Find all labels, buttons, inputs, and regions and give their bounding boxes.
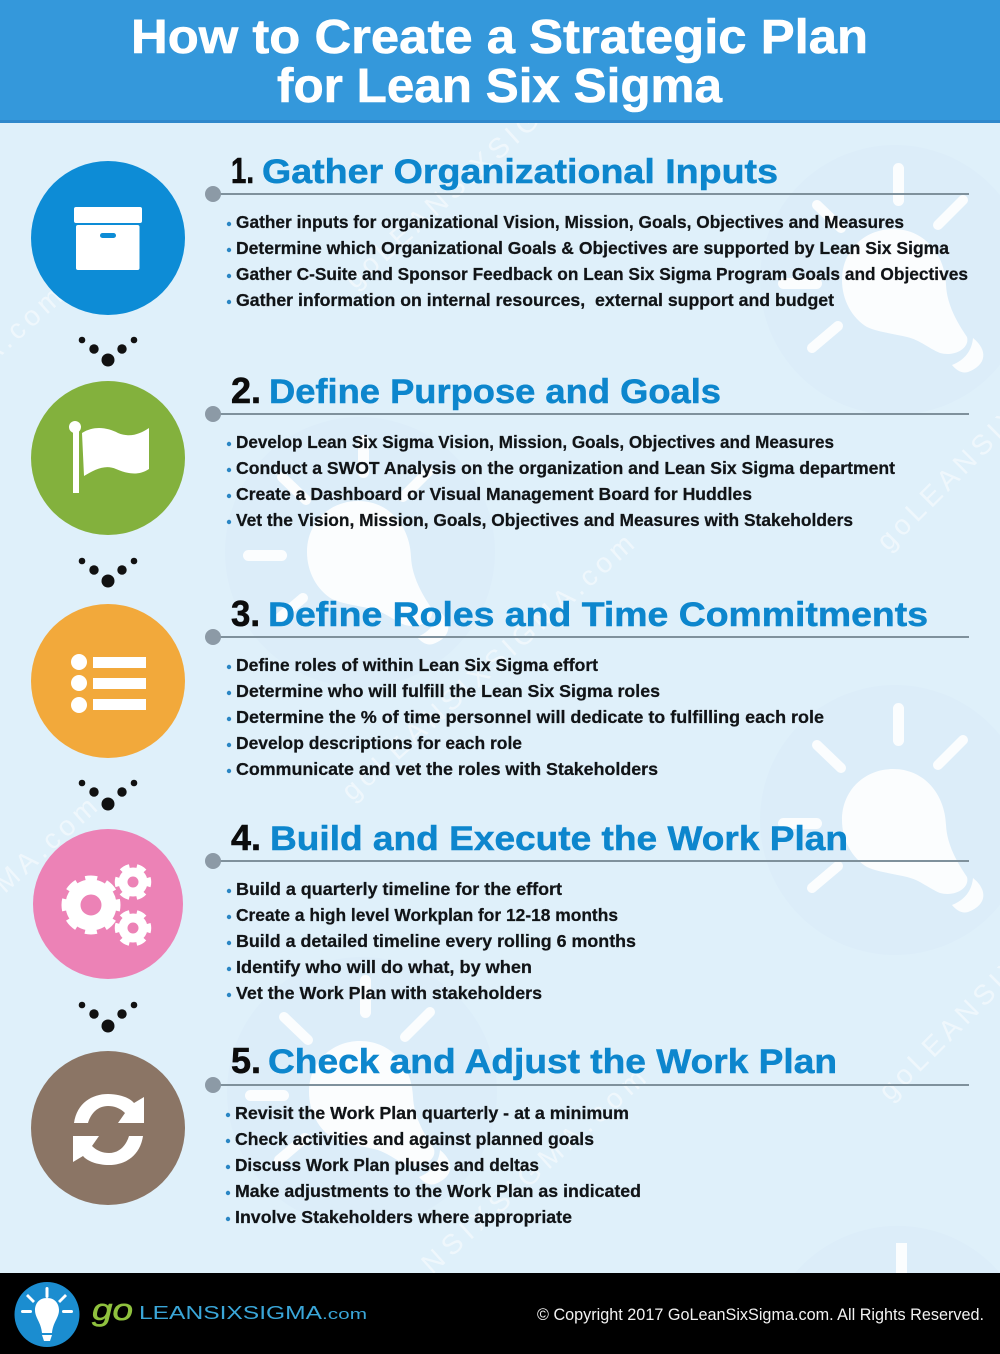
step 5 bullets: Check activities and against planned goals bbox=[235, 1129, 594, 1149]
step 1 section bbox=[205, 150, 969, 310]
footer logo wordmark: .com bbox=[322, 1306, 367, 1323]
step 4 bullets: Identify who will do what, by when bbox=[236, 957, 532, 977]
step 2 heading: 2. bbox=[231, 370, 261, 411]
step 4 rule bbox=[205, 853, 969, 869]
footer logo icon: light bulb bbox=[14, 1282, 80, 1347]
step 3 heading: 3. bbox=[231, 593, 260, 634]
step 5 icon: refresh arrows bbox=[31, 1051, 185, 1205]
step 1 bullets bbox=[227, 212, 968, 310]
step 3 rule bbox=[205, 629, 969, 645]
step 3 bullets: Develop descriptions for each role bbox=[236, 733, 522, 753]
copyright: © Copyright 2017 GoLeanSixSigma.com. All Rights Reserved. bbox=[537, 1306, 984, 1324]
step 2 icon: flag bbox=[31, 381, 185, 535]
title: How to Create a Strategic Plan bbox=[131, 11, 868, 64]
step 1 bullets: Determine which Organizational Goals & Objectives are supported by Lean Six Sigma bbox=[236, 238, 949, 258]
step 3 section bbox=[205, 593, 969, 779]
watermark: brand text group: goLEANSIXSIGMA.com bbox=[335, 528, 640, 806]
step 5 section bbox=[205, 1040, 969, 1227]
step 2 heading: Define Purpose and Goals bbox=[269, 373, 721, 411]
footer logo wordmark: go bbox=[92, 1292, 133, 1327]
step 2 bullets: Develop Lean Six Sigma Vision, Mission, Goals, Objectives and Measures bbox=[236, 432, 834, 452]
header banner bbox=[0, 0, 1000, 123]
step 5 heading: Check and Adjust the Work Plan bbox=[268, 1043, 837, 1081]
step 1 bullets: Gather C-Suite and Sponsor Feedback on Lean Six Sigma Program Goals and Objectives bbox=[236, 264, 968, 284]
step 5 bullets: Make adjustments to the Work Plan as indicated bbox=[235, 1181, 641, 1201]
step 4 section bbox=[205, 817, 969, 1003]
connector dots 2 bbox=[79, 558, 137, 588]
step 2 bullets: Create a Dashboard or Visual Management Board for Huddles bbox=[236, 484, 752, 504]
step 3 heading: Define Roles and Time Commitments bbox=[268, 596, 928, 634]
step 3 bullets: Determine the % of time personnel will dedicate to fulfilling each role bbox=[236, 707, 824, 727]
connector dots 4 bbox=[79, 1002, 137, 1032]
footer logo wordmark bbox=[92, 1292, 367, 1327]
step 4 icon: gears bbox=[33, 829, 183, 979]
step 2 bullets: Vet the Vision, Mission, Goals, Objectives and Measures with Stakeholders bbox=[236, 510, 853, 530]
step 1 rule bbox=[205, 186, 969, 202]
watermark: brand text group: goLEANSIXSIGMA.com bbox=[338, 16, 643, 294]
step 1 heading: 1. bbox=[231, 150, 254, 191]
footer logo wordmark: LEANSIXSIGMA bbox=[139, 1303, 322, 1323]
title bbox=[131, 11, 868, 113]
title: for Lean Six Sigma bbox=[277, 60, 722, 113]
step 4 bullets bbox=[227, 879, 636, 1003]
step 2 section bbox=[205, 370, 969, 530]
step 4 bullets: Create a high level Workplan for 12-18 months bbox=[236, 905, 618, 925]
watermark: light bulb bottom right bbox=[795, 1226, 1000, 1273]
step 1 icon: archive box bbox=[31, 161, 185, 315]
step 4 bullets: Vet the Work Plan with stakeholders bbox=[236, 983, 542, 1003]
step 3 bullets: Define roles of within Lean Six Sigma effort bbox=[236, 655, 598, 675]
connector dots 1 bbox=[79, 337, 137, 366]
step 3 bullets bbox=[227, 655, 824, 779]
step 1 bullets: Gather information on internal resources, external support and budget bbox=[236, 290, 834, 310]
watermark: light bulb lower centre bbox=[227, 957, 497, 1227]
step 3 icon: list bbox=[31, 604, 185, 758]
step 2 bullets: Conduct a SWOT Analysis on the organization and Lean Six Sigma department bbox=[236, 458, 895, 478]
step 1 heading: Gather Organizational Inputs bbox=[262, 153, 778, 191]
step 5 rule bbox=[205, 1077, 969, 1093]
watermark: brand text group: NSIXSIGMA.com bbox=[415, 1062, 652, 1279]
step 4 heading: Build and Execute the Work Plan bbox=[270, 820, 848, 858]
step 3 bullets: Communicate and vet the roles with Stakeholders bbox=[236, 759, 658, 779]
watermark: light bulb top right bbox=[760, 145, 1000, 415]
footer bar bbox=[0, 1273, 1000, 1354]
step 5 heading: 5. bbox=[231, 1040, 261, 1081]
step 4 heading: 4. bbox=[231, 817, 261, 858]
step 2 bullets bbox=[227, 432, 895, 530]
step 5 bullets bbox=[226, 1103, 641, 1227]
step 4 bullets: Build a detailed timeline every rolling 6 months bbox=[236, 931, 636, 951]
step 5 bullets: Discuss Work Plan pluses and deltas bbox=[235, 1155, 539, 1175]
watermark: light bulb centre bbox=[225, 417, 495, 687]
step 3 bullets: Determine who will fulfill the Lean Six Sigma roles bbox=[236, 681, 660, 701]
connector dots 3 bbox=[79, 780, 137, 810]
step 5 bullets: Involve Stakeholders where appropriate bbox=[235, 1207, 572, 1227]
step 1 bullets: Gather inputs for organizational Vision, Mission, Goals, Objectives and Measures bbox=[236, 212, 904, 232]
step 4 bullets: Build a quarterly timeline for the effort bbox=[236, 879, 562, 899]
step 5 bullets: Revisit the Work Plan quarterly - at a minimum bbox=[235, 1103, 629, 1123]
step 2 rule bbox=[205, 406, 969, 422]
watermark: light bulb middle right bbox=[760, 685, 1000, 955]
